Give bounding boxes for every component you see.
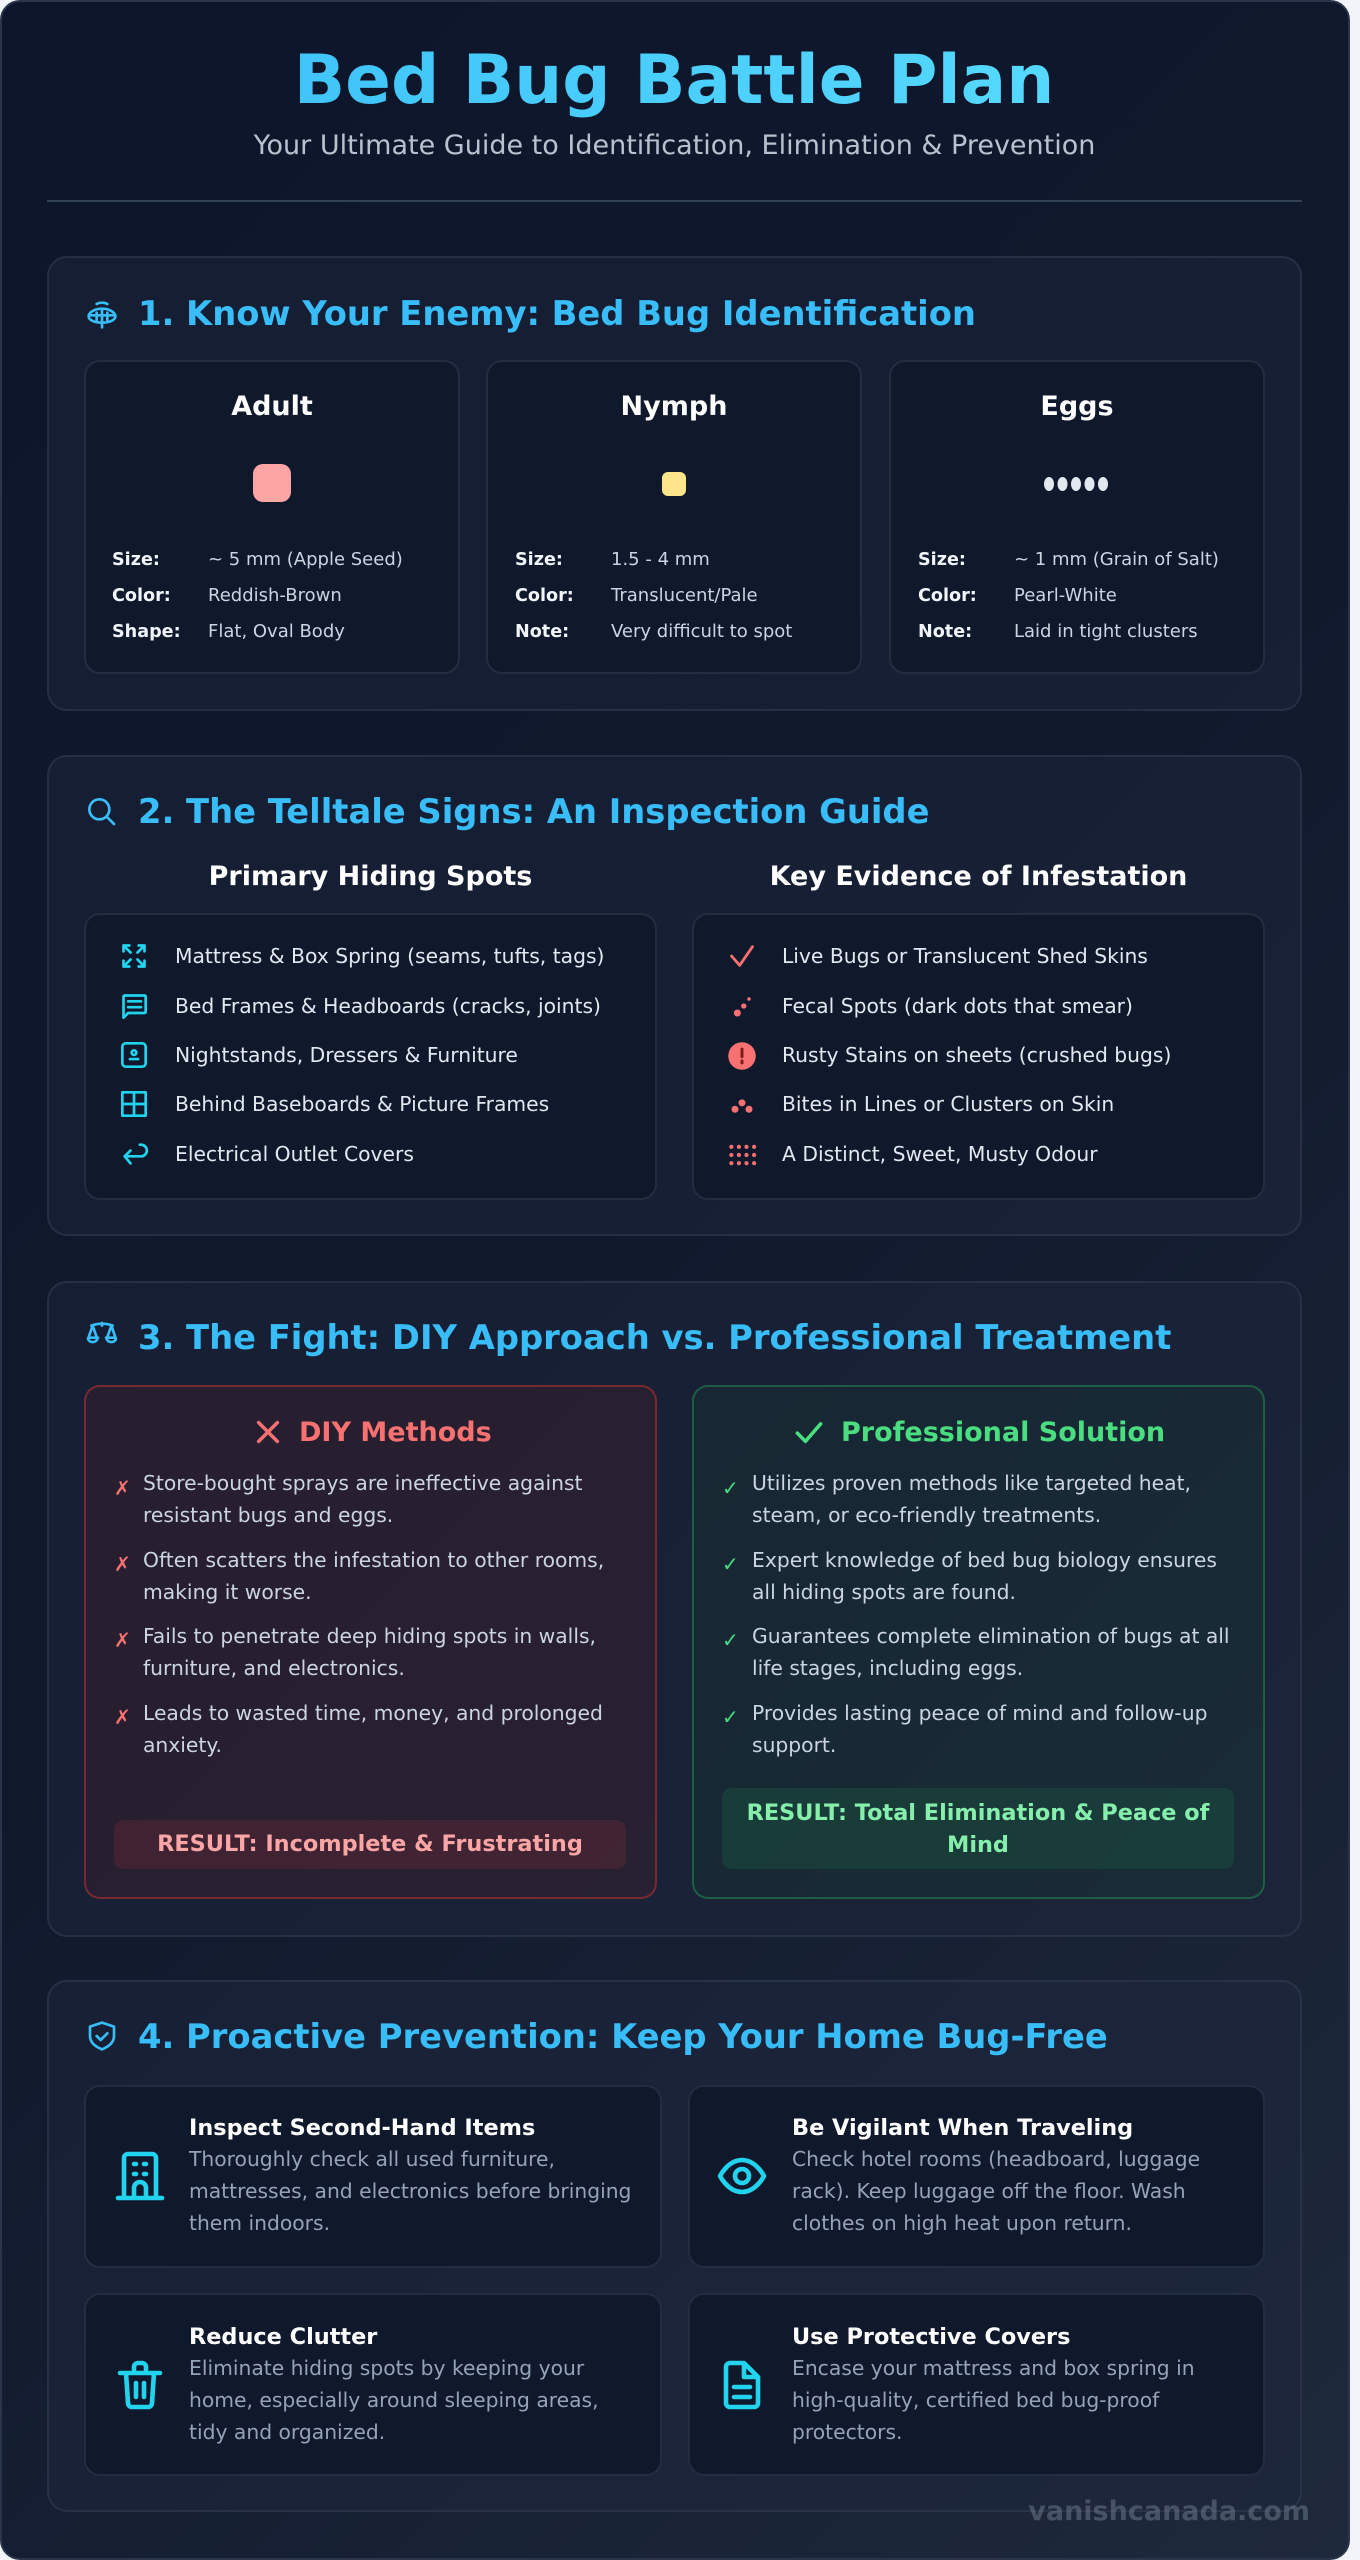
- nymph note: Note:: [515, 622, 569, 642]
- text: odour: A Distinct, Sweet, Musty Odour: [782, 1142, 1098, 1166]
- icon: bug: [87, 301, 117, 329]
- text: mattress: Mattress & Box Spring (seams, tufts, tags): [175, 944, 604, 968]
- DIY point 2: Often scatters the infestation to other rooms,: [143, 1548, 604, 1572]
- icon: return arrow: [123, 1143, 148, 1165]
- text: travel: Check hotel rooms (headboard, luggage: [792, 2147, 1200, 2171]
- panel: section 2 inspection: [47, 755, 1302, 1236]
- professional point 4: ✓: [722, 1705, 739, 1729]
- professional point 1: Utilizes proven methods like targeted heat,: [752, 1471, 1191, 1495]
- text: second-hand items: Thoroughly check all used furniture,: [189, 2147, 555, 2171]
- card title: eggs: Eggs: [1040, 391, 1114, 422]
- DIY point 1: ✗: [114, 1476, 131, 1500]
- icon: cross: [256, 1420, 280, 1444]
- text: nightstands: Nightstands, Dressers & Furniture: [175, 1043, 518, 1067]
- DIY point 4: Leads to wasted time, money, and prolonged: [143, 1701, 603, 1725]
- professional point 1: [722, 1471, 1191, 1527]
- icon: scales: [86, 1322, 118, 1344]
- card: eggs: Laid in tight clusters: [1014, 621, 1198, 642]
- eggs size: [918, 549, 1219, 570]
- panel: section 1 identification: [47, 256, 1302, 711]
- title: [0, 38, 1348, 122]
- panel: hiding spots list: [84, 913, 657, 1200]
- text: second-hand items: [188, 2147, 631, 2235]
- professional point 3: Guarantees complete elimination of bugs at all: [752, 1624, 1230, 1648]
- card: adult: [84, 360, 460, 674]
- panel: evidence list: [692, 913, 1265, 1200]
- DIY point 2: [114, 1548, 604, 1604]
- DIY point 3: [114, 1624, 596, 1680]
- card title: nymph: Nymph: [621, 391, 727, 422]
- professional result: [722, 1788, 1234, 1869]
- icon: bites: [732, 1099, 752, 1113]
- adult size: Size:: [112, 550, 160, 570]
- adult color: Color:: [112, 586, 171, 606]
- text: clutter: [189, 2356, 599, 2444]
- card: adult: Reddish-Brown: [208, 585, 342, 606]
- professional point 4: [722, 1701, 1207, 1757]
- title: covers: Use Protective Covers: [792, 2324, 1070, 2350]
- text: clutter: tidy and organized.: [189, 2420, 385, 2444]
- DIY point 4: ✗: [114, 1705, 131, 1729]
- eggs size: Size:: [918, 550, 966, 570]
- professional point 4: Provides lasting peace of mind and follow-up: [752, 1701, 1207, 1725]
- card title: adult: Adult: [231, 391, 313, 422]
- text: rusty stains: Rusty Stains on sheets (crushed bugs): [782, 1043, 1171, 1067]
- card: nymph: Very difficult to spot: [611, 621, 792, 642]
- icon: tick: [796, 1422, 822, 1444]
- professional point 3: life stages, including eggs.: [752, 1656, 1023, 1680]
- icon: expand: [122, 944, 146, 968]
- text: covers: high-quality, certified bed bug-proof: [792, 2388, 1159, 2412]
- professional point 3: [722, 1624, 1230, 1680]
- DIY point 4: anxiety.: [143, 1733, 222, 1757]
- professional point 2: ✓: [722, 1552, 739, 1576]
- professional point 1: steam, or eco-friendly treatments.: [752, 1503, 1101, 1527]
- text: covers: protectors.: [792, 2420, 902, 2444]
- DIY point 1: Store-bought sprays are ineffective against: [143, 1471, 582, 1495]
- professional result: Mind: [947, 1832, 1009, 1858]
- nymph color: [515, 585, 758, 606]
- text: travel: clothes on high heat upon return.: [792, 2211, 1132, 2235]
- panel: section 4 prevention: [47, 1980, 1302, 2512]
- header divider: [47, 200, 1302, 202]
- heading: evidence: Key Evidence of Infestation: [770, 861, 1187, 892]
- card: clutter: [84, 2293, 662, 2476]
- DIY point 3: furniture, and electronics.: [143, 1656, 405, 1680]
- professional point 2: [722, 1548, 1217, 1604]
- heading: section 1: 1. Know Your Enemy: Bed Bug Identification: [138, 294, 976, 333]
- adult shape: [112, 621, 345, 642]
- heading: section 3: 3. The Fight: DIY Approach vs. Professional Treatment: [138, 1318, 1171, 1357]
- text: outlets: Electrical Outlet Covers: [175, 1142, 414, 1166]
- icon: building: [116, 2152, 164, 2200]
- card: second-hand items: [84, 2085, 662, 2268]
- heading: section 4: 4. Proactive Prevention: Keep Your Home Bug-Free: [138, 2017, 1108, 2056]
- heading: section 2: 2. The Telltale Signs: An Inspection Guide: [138, 792, 929, 831]
- icon: check: [730, 945, 754, 967]
- title: second-hand items: Inspect Second-Hand Items: [189, 2115, 535, 2141]
- DIY result: [114, 1820, 626, 1869]
- text: covers: Encase your mattress and box spring in: [792, 2356, 1195, 2380]
- text: baseboards: Behind Baseboards & Picture Frames: [175, 1092, 549, 1116]
- nymph size: [515, 549, 710, 570]
- icon: trash: [118, 2360, 162, 2410]
- subtitle: Your Ultimate Guide to Identification, Elimination & Prevention: [254, 130, 1095, 161]
- card: eggs: ~ 1 mm (Grain of Salt): [1014, 549, 1219, 570]
- text: travel: [792, 2147, 1200, 2235]
- icon: alert: [728, 1042, 756, 1070]
- eggs note: Note:: [918, 622, 972, 642]
- panel: professional solution: [692, 1385, 1265, 1899]
- icon: fecal spots: [734, 997, 751, 1016]
- text: live bugs: Live Bugs or Translucent Shed Skins: [782, 944, 1148, 968]
- card: covers: [688, 2293, 1265, 2476]
- text: bed frames: Bed Frames & Headboards (cracks, joints): [175, 994, 601, 1018]
- icon: frame grid: [121, 1091, 147, 1117]
- card: eggs: [889, 360, 1265, 674]
- DIY point 1: [114, 1471, 582, 1527]
- card: travel: [688, 2085, 1265, 2268]
- icon: odour dots: [729, 1144, 756, 1166]
- title: Bed Bug Battle Plan: [294, 40, 1054, 119]
- watermark: vanishcanada.com: [1028, 2496, 1310, 2527]
- text: bites: Bites in Lines or Clusters on Skin: [782, 1092, 1114, 1116]
- adult size: [112, 549, 403, 570]
- icon: adult bug: [253, 464, 291, 502]
- icon: nymph bug: [662, 472, 686, 496]
- card: nymph: Translucent/Pale: [611, 585, 758, 606]
- DIY point 3: Fails to penetrate deep hiding spots in walls,: [143, 1624, 596, 1648]
- heading: hiding spots: Primary Hiding Spots: [209, 861, 532, 892]
- nymph size: Size:: [515, 550, 563, 570]
- nymph note: [515, 621, 792, 642]
- icon: shield: [88, 2021, 116, 2051]
- icon: chat bubble: [122, 994, 147, 1020]
- professional point 3: ✓: [722, 1628, 739, 1652]
- eggs note: [918, 621, 1198, 642]
- text: clutter: home, especially around sleeping areas,: [189, 2388, 599, 2412]
- eggs color: Color:: [918, 586, 977, 606]
- nymph color: Color:: [515, 586, 574, 606]
- title: travel: Be Vigilant When Traveling: [792, 2115, 1133, 2141]
- text: second-hand items: mattresses, and electronics before bringing: [189, 2179, 631, 2203]
- icon: document: [718, 2361, 766, 2409]
- card: nymph: [486, 360, 862, 674]
- icon: eye: [718, 2158, 766, 2194]
- text: travel: rack). Keep luggage off the floor. Wash: [792, 2179, 1186, 2203]
- text: fecal spots: Fecal Spots (dark dots that smear): [782, 994, 1133, 1018]
- card: nymph: 1.5 - 4 mm: [611, 549, 710, 570]
- adult color: [112, 585, 342, 606]
- professional point 4: support.: [752, 1733, 836, 1757]
- panel: DIY methods: [84, 1385, 657, 1899]
- professional point 2: Expert knowledge of bed bug biology ensures: [752, 1548, 1217, 1572]
- DIY point 1: resistant bugs and eggs.: [143, 1503, 393, 1527]
- title: clutter: Reduce Clutter: [189, 2324, 377, 2350]
- DIY point 2: ✗: [114, 1552, 131, 1576]
- icon: nightstand: [121, 1042, 147, 1068]
- icon: magnifier: [88, 798, 116, 826]
- card: adult: Flat, Oval Body: [208, 621, 345, 642]
- icon: egg cluster: [1044, 477, 1108, 491]
- card: adult: ~ 5 mm (Apple Seed): [208, 549, 403, 570]
- DIY point 3: ✗: [114, 1628, 131, 1652]
- heading: DIY: DIY Methods: [299, 1417, 492, 1448]
- DIY point 4: [114, 1701, 603, 1757]
- DIY point 2: making it worse.: [143, 1580, 312, 1604]
- text: covers: [792, 2352, 1195, 2448]
- text: second-hand items: them indoors.: [189, 2211, 330, 2235]
- heading: professional: Professional Solution: [841, 1417, 1165, 1448]
- DIY result: RESULT: Incomplete & Frustrating: [157, 1831, 583, 1857]
- adult shape: Shape:: [112, 622, 181, 642]
- eggs color: [918, 585, 1117, 606]
- panel: section 3 fight: [47, 1281, 1302, 1937]
- card: eggs: Pearl-White: [1014, 585, 1117, 606]
- text: clutter: Eliminate hiding spots by keeping your: [189, 2356, 584, 2380]
- professional point 1: ✓: [722, 1476, 739, 1500]
- professional point 2: all hiding spots are found.: [752, 1580, 1016, 1604]
- professional result: RESULT: Total Elimination & Peace of: [747, 1800, 1209, 1826]
